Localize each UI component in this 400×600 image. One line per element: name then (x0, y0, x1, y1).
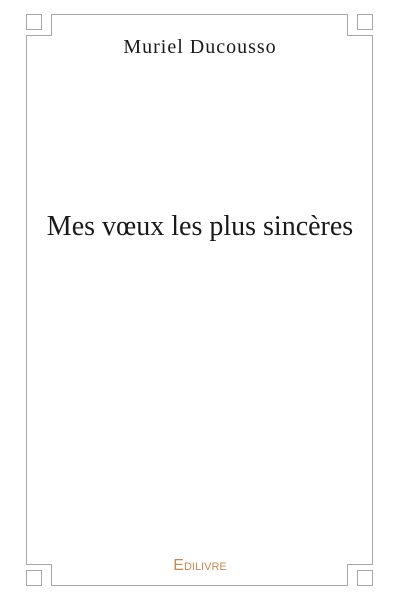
corner square: top right (358, 14, 372, 30)
corner square: top left (26, 14, 42, 30)
corner square: bottom right (358, 570, 372, 586)
book title: Mes vœux les plus sincères (47, 211, 353, 242)
publisher logo: Edilivre: Edilivre (173, 557, 227, 574)
corner square: bottom left (26, 570, 42, 586)
author name: Muriel Ducousso (123, 36, 277, 58)
